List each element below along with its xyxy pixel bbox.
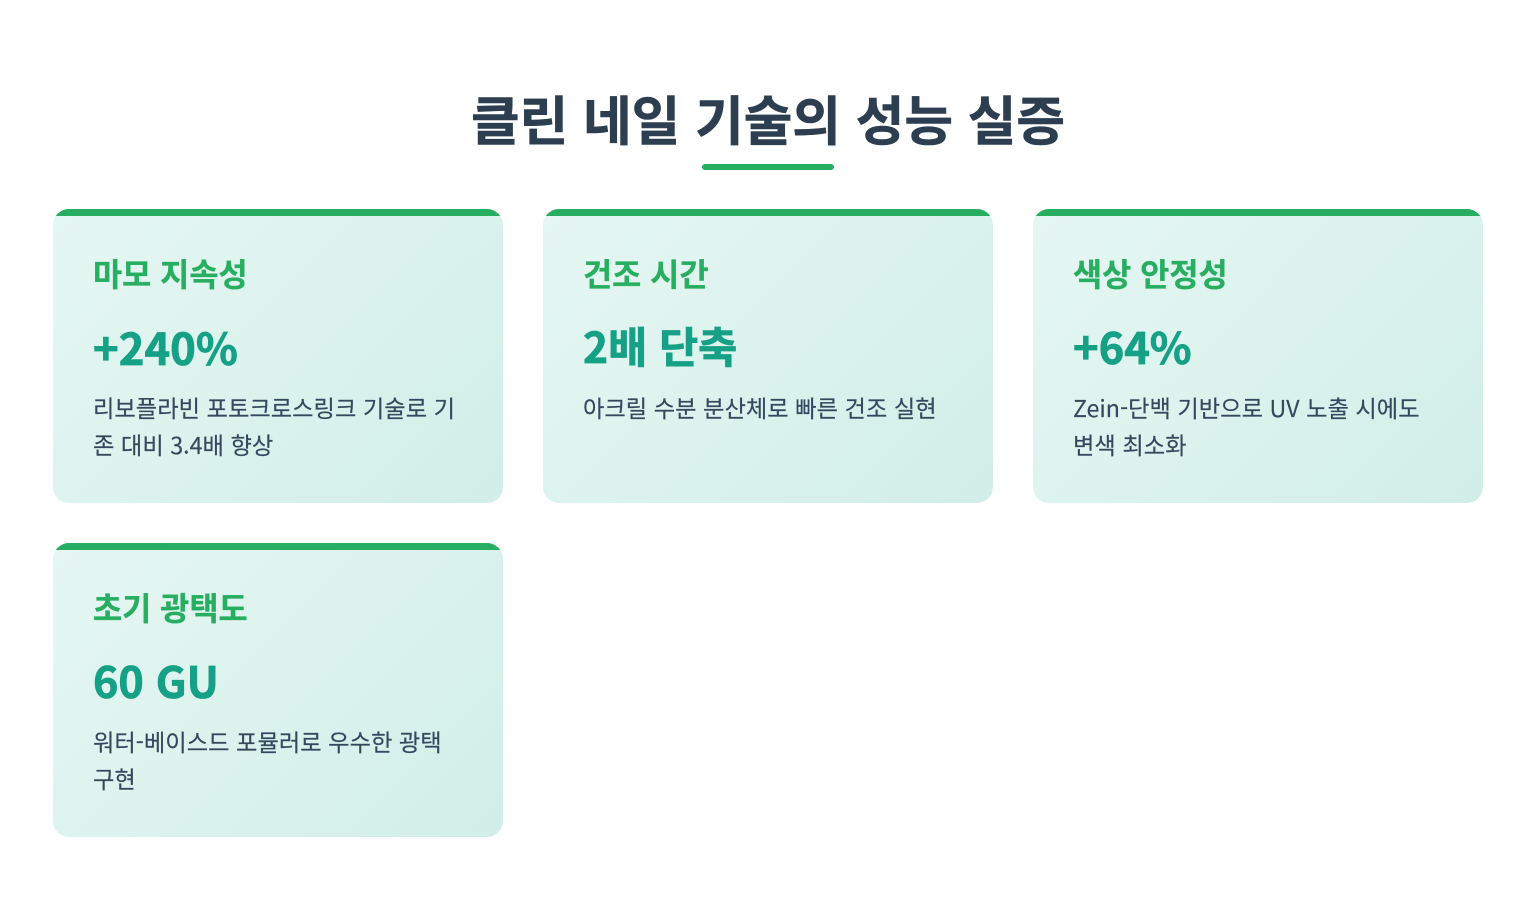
title underline bbox=[702, 164, 834, 170]
description bbox=[1073, 390, 1420, 460]
panel: drying time bbox=[543, 209, 993, 503]
card heading: 건조 시간 bbox=[583, 250, 708, 296]
card top accent bar bbox=[53, 209, 503, 216]
metric value: 60 GU bbox=[93, 649, 219, 711]
description: 워터-베이스드 포뮬러로 우수한 광택 bbox=[93, 724, 442, 758]
card heading: 초기 광택도 bbox=[93, 584, 248, 630]
description bbox=[93, 724, 442, 794]
card heading: 마모 지속성 bbox=[93, 250, 248, 296]
metric value: +240% bbox=[93, 314, 238, 378]
description: 변색 최소화 bbox=[1073, 426, 1187, 460]
metric value: +64% bbox=[1073, 315, 1192, 377]
description: 아크릴 수분 분산체로 빠른 건조 실현 bbox=[583, 390, 937, 424]
panel: initial gloss bbox=[53, 543, 503, 837]
card top accent bar bbox=[1033, 209, 1483, 216]
description: 구현 bbox=[93, 760, 136, 794]
metric value: 2배 단축 bbox=[583, 315, 737, 376]
title: 클린 네일 기술의 성능 실증 bbox=[471, 80, 1065, 156]
panel: wear durability bbox=[53, 209, 503, 503]
description bbox=[93, 390, 455, 460]
card top accent bar bbox=[53, 543, 503, 550]
card heading: 색상 안정성 bbox=[1073, 250, 1228, 296]
card top accent bar bbox=[543, 209, 993, 216]
panel: color stability bbox=[1033, 209, 1483, 503]
description: 리보플라빈 포토크로스링크 기술로 기 bbox=[93, 390, 455, 424]
description: 존 대비 3.4배 향상 bbox=[93, 426, 273, 460]
description: Zein-단백 기반으로 UV 노출 시에도 bbox=[1073, 390, 1420, 424]
